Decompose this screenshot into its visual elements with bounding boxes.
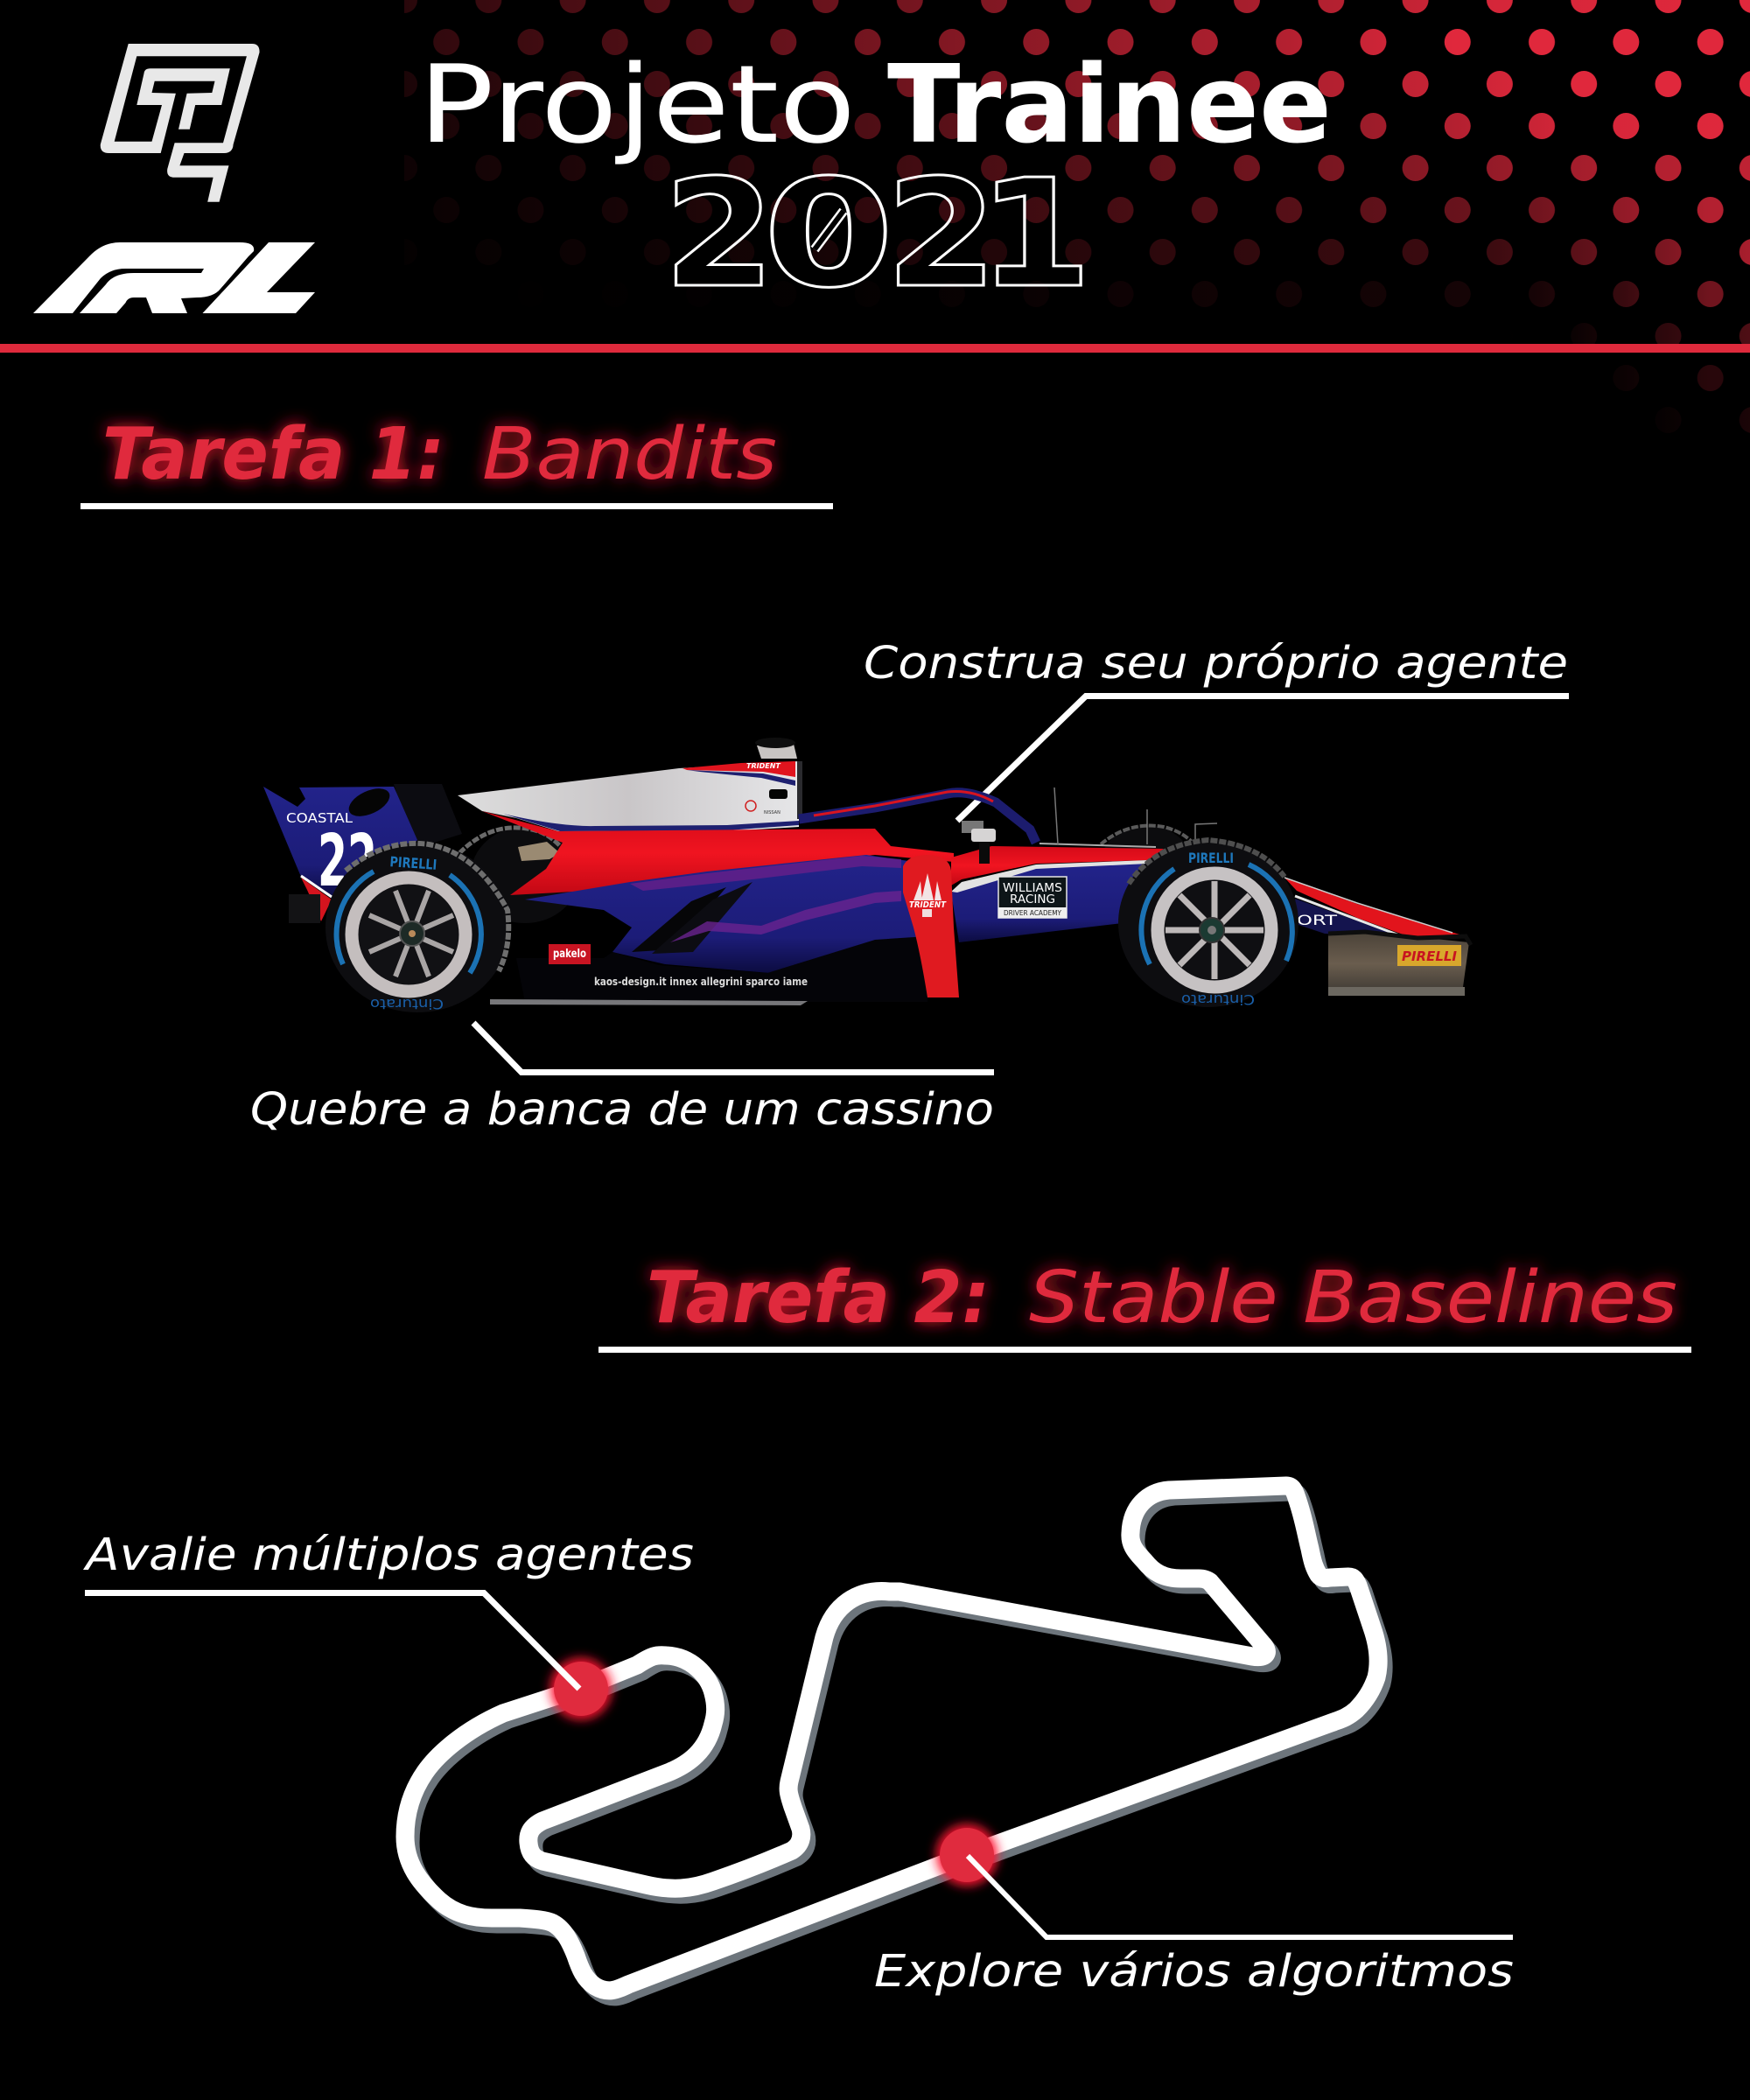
- halo: [799, 791, 1036, 843]
- rear wing: [263, 783, 417, 923]
- far rear tyre: [459, 827, 579, 923]
- sidepod: [516, 855, 928, 1002]
- title: Projeto Trainee: Projeto: [418, 43, 856, 168]
- rear wheel: [326, 843, 509, 1012]
- Williams badge: RACING: [1010, 893, 1055, 906]
- front wheel: Cinturato: [1181, 991, 1255, 1008]
- engine cover: [458, 761, 802, 831]
- title: 2021 outline: 2: [663, 148, 775, 321]
- heading: Tarefa 1: [102, 413, 777, 496]
- engine cover: NISSAN: [764, 810, 780, 816]
- nose top: ORT: [1297, 912, 1337, 928]
- red front fin: [903, 855, 959, 998]
- rear wing: COASTAL: [286, 810, 354, 826]
- floor plank: [490, 999, 808, 1005]
- title: 2021 outline: 0: [763, 148, 894, 321]
- heading: Tarefa 2: Tarefa 2:: [647, 1256, 990, 1340]
- floor sponsors: kaos-design.it innex allegrini sparco iame: [594, 976, 808, 988]
- heading 2 underline: [598, 1347, 1691, 1353]
- title: 2021 outline: 1: [978, 148, 1092, 321]
- track line: [405, 1486, 1378, 1991]
- front wheel: PIRELLI: [1188, 850, 1234, 866]
- race track: [405, 1486, 1383, 1997]
- sponsor: pakelo: pakelo: [553, 948, 586, 961]
- marker: dot on track 1: [550, 1658, 612, 1719]
- title: 2021 outline: [663, 148, 1092, 321]
- callout line: Explore: [968, 1856, 1513, 1937]
- callout line: Quebre: [473, 1023, 994, 1073]
- rear wing: 22: [318, 820, 377, 903]
- airbox: [746, 738, 797, 770]
- halftone dot pattern: [404, 0, 1750, 441]
- far front tyre: [1099, 825, 1194, 911]
- Williams badge: WILLIAMS: [1003, 882, 1062, 895]
- front wing endplate: [1328, 932, 1471, 996]
- rear wing endplate support: [394, 784, 462, 843]
- red front fin: TRIDENT: [909, 900, 947, 910]
- red bodywork: [482, 811, 954, 895]
- callout text: Explore vários algoritmos: Explore vários algoritmos: [874, 1946, 1514, 1998]
- icon: FRL logo: [33, 242, 315, 313]
- heading: Tarefa 2: [647, 1256, 1677, 1340]
- track shadow: [410, 1492, 1383, 1997]
- rear wheel: Cinturato: [370, 996, 444, 1012]
- callout text: Quebre a banca de um cassino: Quebre a banca de um cassino: [250, 1084, 994, 1136]
- Williams badge: DRIVER ACADEMY: [1004, 909, 1061, 917]
- antennas: [1054, 788, 1217, 844]
- heading 1 underline: [80, 503, 833, 509]
- airbox: TRIDENT: [746, 762, 780, 770]
- front body: [951, 844, 1164, 942]
- heading: Tarefa 1: Bandits: [482, 413, 777, 496]
- mirror: [962, 821, 996, 864]
- title: Projeto Trainee: Trainee: [887, 43, 1332, 168]
- marker: dot on track 2: [936, 1824, 998, 1886]
- sponsor: pakelo: [549, 944, 591, 964]
- front wheel: [1118, 839, 1298, 1008]
- callout line: Construa: [957, 696, 1569, 821]
- nose top: [1284, 878, 1466, 940]
- title: Projeto Trainee: [418, 43, 1332, 168]
- rear wheel: PIRELLI: [389, 853, 438, 873]
- racing car: [263, 738, 1471, 1012]
- callout line: Avalie: [85, 1592, 579, 1689]
- heading: Tarefa 1: Tarefa 1:: [102, 413, 444, 496]
- exhaust: [518, 842, 560, 861]
- title: 2021 outline: 2: [886, 148, 998, 321]
- heading: Tarefa 2: Stable Baselines: [1029, 1256, 1677, 1340]
- header red stripe: [0, 344, 1750, 353]
- icon: TP logo: [101, 44, 260, 202]
- front wing endplate: PIRELLI: [1402, 948, 1457, 964]
- callout text: Avalie múltiplos agentes: Avalie múltiplos agentes: [83, 1530, 694, 1581]
- callout text: Construa seu próprio agente: Construa seu próprio agente: [864, 638, 1568, 690]
- Williams badge: [998, 877, 1067, 918]
